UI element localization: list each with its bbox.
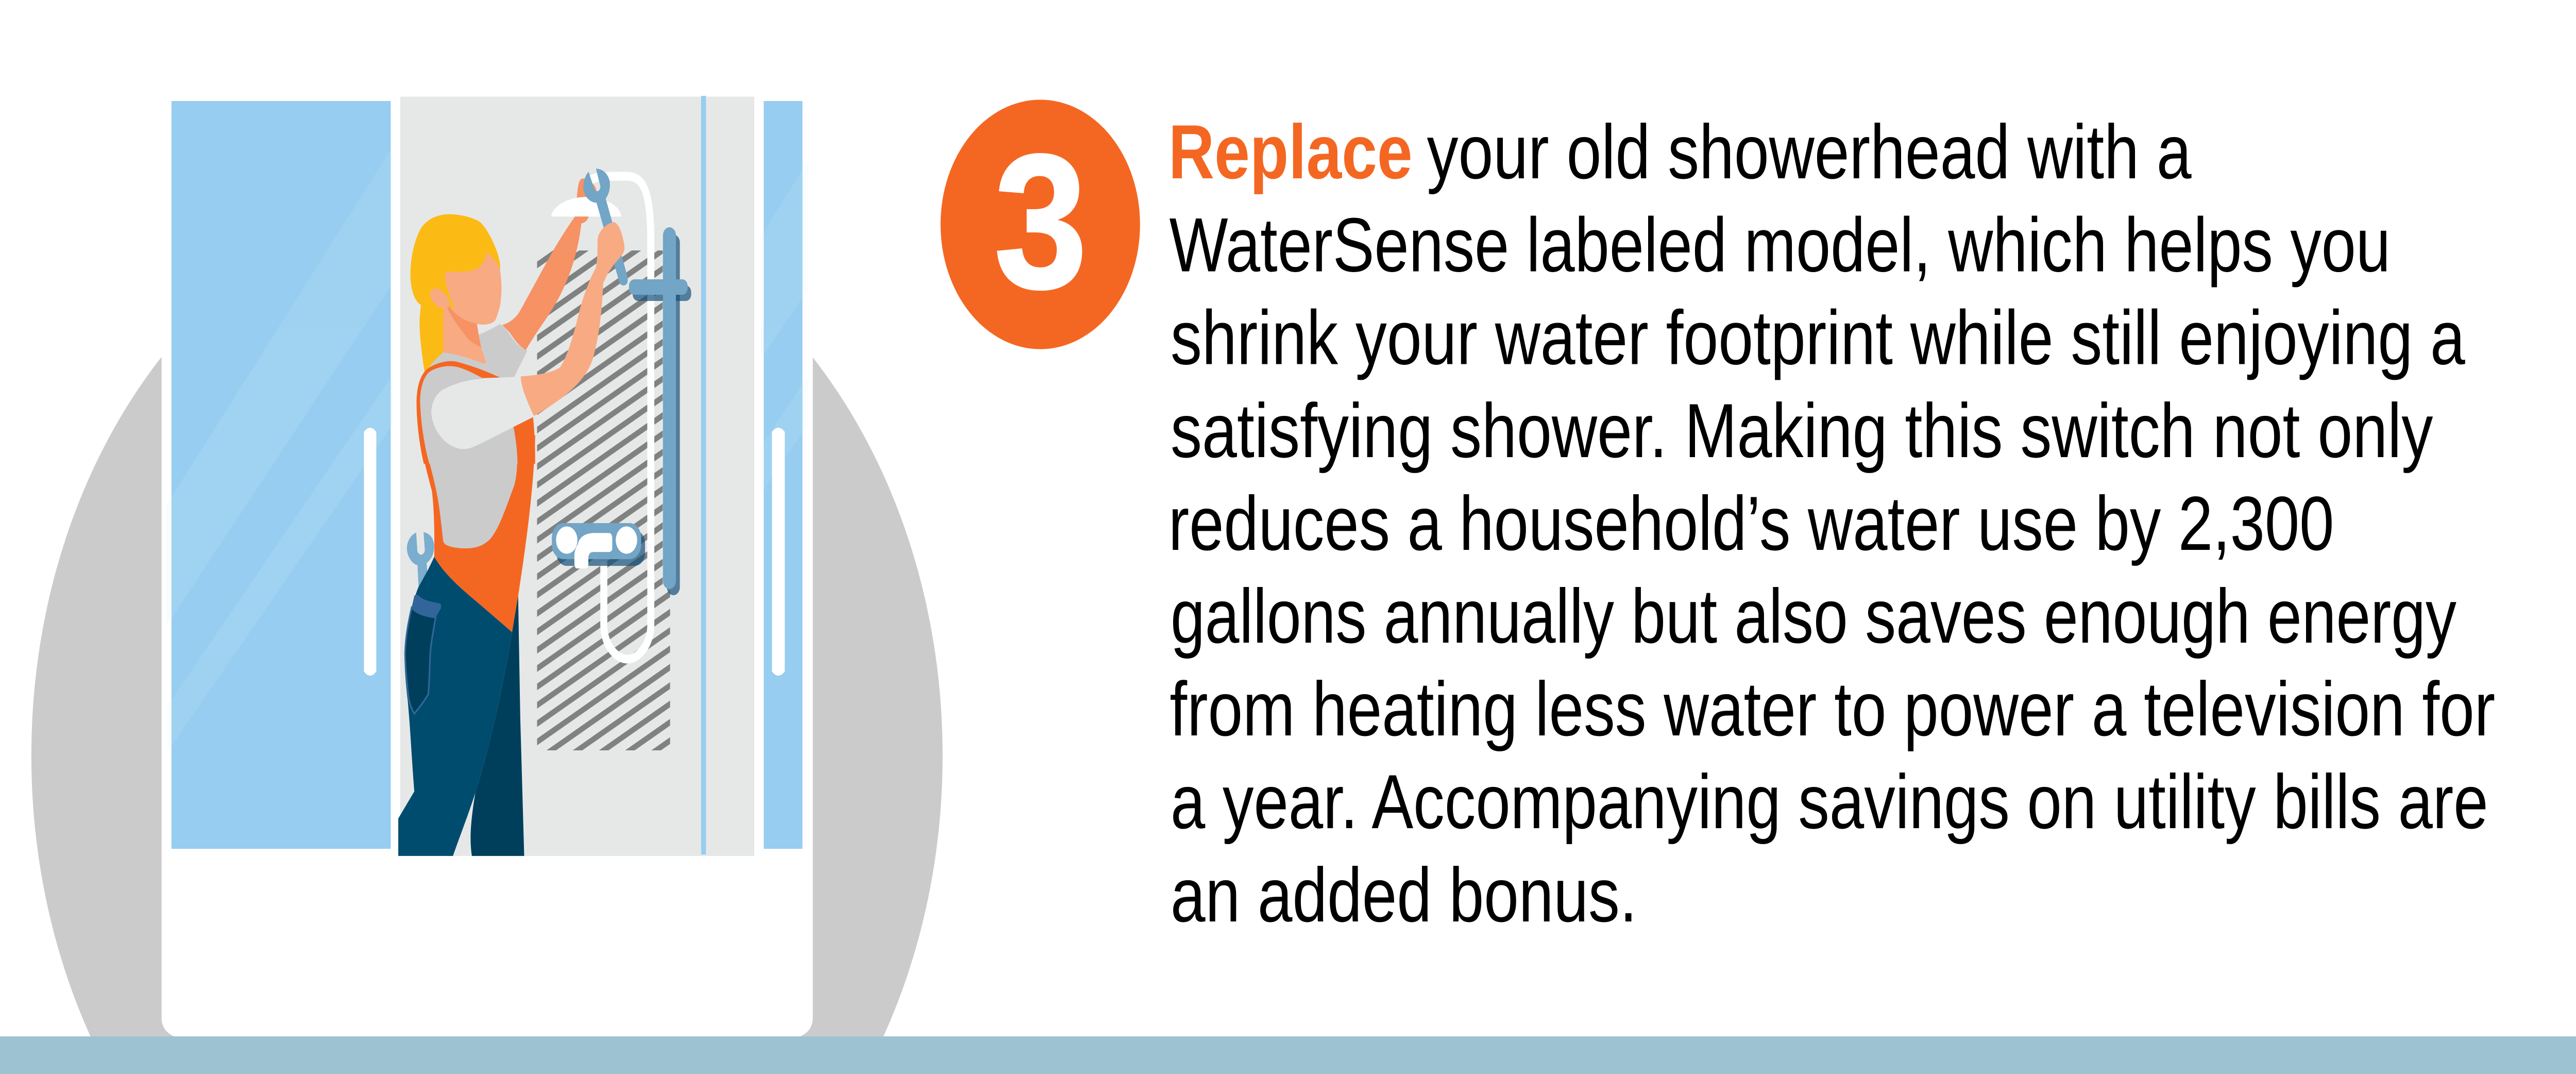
highlighted word: Replace [1168, 109, 1413, 195]
hatched wall tiles [537, 250, 670, 750]
shower pipe and hose [590, 176, 651, 659]
shower back wall [400, 97, 754, 856]
crossbar shadow [633, 286, 691, 301]
worker figure [398, 169, 628, 856]
pocket [405, 608, 436, 714]
badge numeral: 3 [994, 115, 1087, 329]
lower body [398, 435, 535, 856]
line 2: WaterSense labeled model, which helps you [1170, 202, 2391, 288]
overalls strap [417, 361, 500, 464]
raised hands and tools [521, 169, 628, 416]
shirt [420, 324, 527, 464]
line 9: an added bonus. [1171, 852, 1637, 938]
pocket band [412, 595, 441, 617]
blue door edge [701, 96, 706, 854]
right glass reflections [761, 161, 808, 494]
faucet right knob [616, 527, 637, 553]
background circle [31, 186, 943, 1036]
neck shadow [447, 306, 481, 347]
line 8: a year. Accompanying savings on utility bills are [1171, 759, 2488, 845]
line 1: your old showerhead with a [1427, 109, 2192, 195]
line 6: gallons annually but also saves enough energy [1171, 573, 2456, 659]
right glass door [764, 101, 803, 849]
right door handle [772, 428, 785, 676]
floor band [0, 1036, 2576, 1074]
line 3: shrink your water footprint while still enjoying a [1171, 295, 2466, 381]
trousers front leg [398, 557, 512, 856]
showerhead [551, 197, 621, 216]
line 4: satisfying shower. Making this switch not only [1171, 388, 2433, 474]
neck [443, 306, 486, 363]
hair [411, 214, 500, 374]
enclosure base panel [162, 0, 813, 1036]
shirt under bib [423, 435, 517, 548]
wrench [583, 169, 628, 286]
badge circle [941, 100, 1140, 349]
far arm [502, 215, 589, 350]
faucet spout [574, 533, 612, 568]
fingers behind showerhead [577, 178, 597, 198]
shower enclosure [162, 0, 813, 1036]
face [445, 251, 501, 325]
sleeve [431, 377, 534, 449]
line 5: reduces a household’s water use by 2,300 [1168, 480, 2334, 566]
near arm and hand [521, 222, 624, 416]
left door handle [364, 428, 376, 676]
left glass reflections [166, 146, 393, 753]
ear [430, 289, 450, 308]
rail shadow [667, 234, 680, 595]
crossbar [629, 279, 688, 295]
line 7: from heating less water to power a television for [1170, 666, 2495, 752]
number badge [941, 100, 1140, 349]
shower fixture [552, 176, 691, 659]
body text [1168, 109, 2495, 938]
wrench in pocket [407, 532, 434, 601]
faucet left knob [556, 527, 578, 553]
upper body [411, 214, 589, 464]
overalls bib [419, 435, 535, 632]
gap behind collar [477, 321, 500, 334]
rail [663, 227, 676, 589]
faucet body [552, 523, 641, 559]
faucet shadow [556, 530, 645, 566]
overalls side [514, 417, 535, 464]
left glass door [172, 101, 391, 849]
trousers back leg [470, 596, 524, 856]
